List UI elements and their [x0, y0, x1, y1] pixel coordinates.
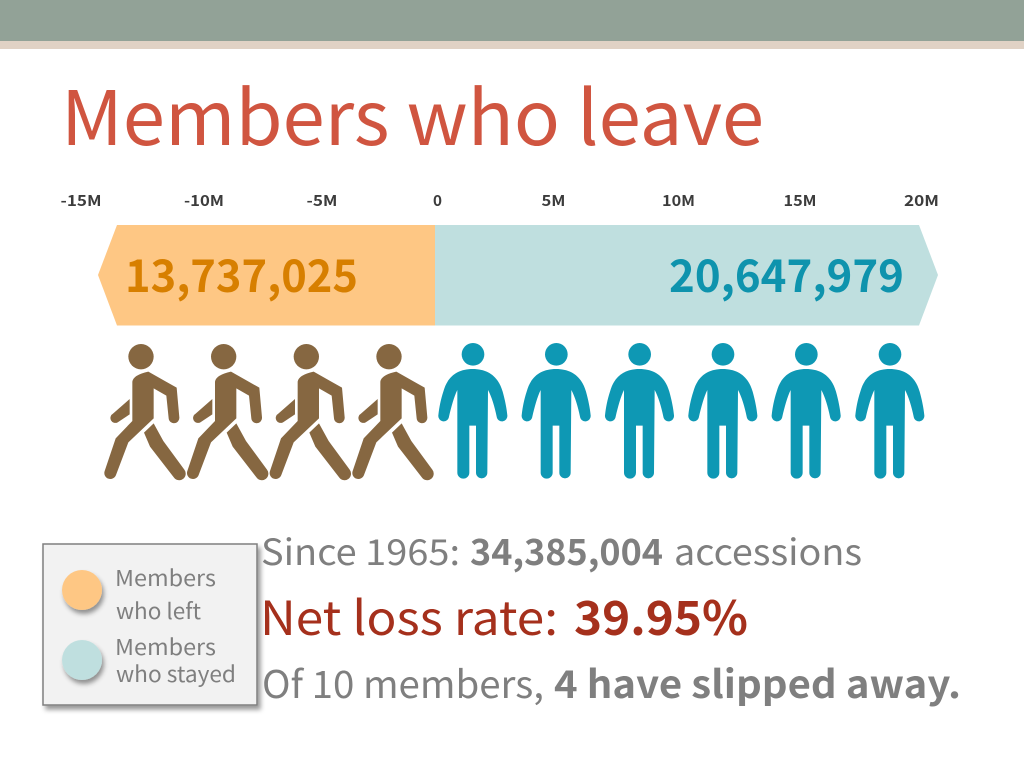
person 2	[522, 343, 591, 479]
person 4	[688, 343, 757, 479]
stat: accessions	[261, 524, 862, 576]
bar: members who stayed: 20,647,979	[669, 240, 904, 305]
axis labels: 20M	[904, 190, 939, 211]
title: Members who leave	[61, 58, 764, 167]
walker 2	[187, 344, 268, 480]
stat: accessions: accessions	[674, 524, 862, 576]
stat: of 10 members: Of 10 members,	[262, 654, 544, 709]
legend	[43, 544, 257, 705]
axis labels: -5M	[306, 190, 338, 211]
axis labels: -15M	[60, 190, 102, 211]
walker 1	[104, 344, 186, 480]
stat: net loss rate: 39.95%	[574, 580, 748, 649]
stat: of 10 members	[262, 654, 961, 709]
top banner	[0, 0, 1024, 49]
walker 3	[270, 344, 351, 480]
stat: net loss rate	[260, 580, 748, 649]
person 3	[605, 343, 674, 479]
legend label: stayed: Members	[115, 630, 216, 662]
axis labels: 5M	[542, 190, 566, 211]
icons: standing figures	[438, 343, 924, 479]
person 6	[855, 343, 924, 479]
legend swatch: left	[62, 570, 102, 610]
axis labels: 10M	[662, 190, 695, 211]
legend swatch: stayed	[62, 640, 102, 680]
walker 4	[352, 344, 434, 480]
stat: accessions: Since 1965:	[261, 524, 460, 576]
bar: members who left	[98, 225, 435, 326]
legend label: left: Members	[115, 561, 216, 593]
stat: net loss rate: Net loss rate:	[260, 580, 558, 649]
axis labels: 15M	[784, 190, 816, 211]
stat: of 10 members: 4 have slipped away.	[554, 654, 961, 709]
bar: members who left: 13,737,025	[125, 240, 358, 305]
axis labels: -10M	[184, 190, 224, 211]
legend label: left: who left	[116, 594, 201, 626]
bar: members who stayed	[435, 225, 938, 326]
person 5	[772, 343, 841, 479]
stat: accessions: 34,385,004	[470, 524, 663, 576]
legend label: stayed: who stayed	[116, 657, 236, 689]
icons: walking figures	[104, 344, 434, 480]
axis labels	[60, 190, 939, 211]
axis labels: 0	[433, 190, 442, 211]
person 1	[438, 343, 507, 479]
